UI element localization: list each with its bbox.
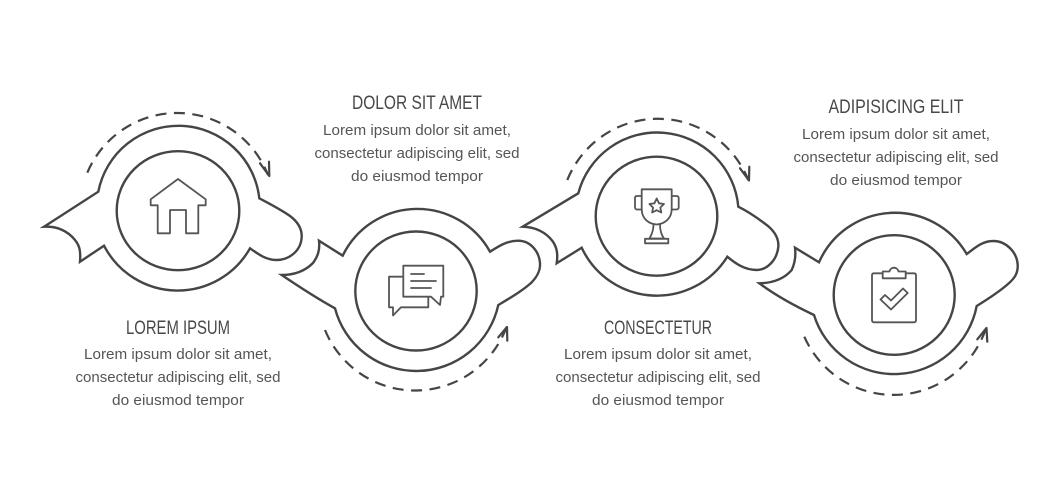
icon: house bbox=[151, 179, 206, 233]
outer bubble 1 bbox=[44, 126, 302, 291]
panel: step 2 bbox=[282, 209, 540, 391]
text block: lorem ipsum bbox=[76, 318, 280, 409]
dashed arrow 4 bbox=[804, 328, 987, 395]
panel: step 4 bbox=[759, 213, 1018, 395]
outer bubble 3 bbox=[523, 132, 778, 296]
body: consectetur bbox=[556, 347, 760, 409]
icon: trophy bbox=[635, 189, 679, 243]
dashed arrow 1 bbox=[87, 113, 269, 176]
heading: adipisicing elit: ADIPISICING ELIT bbox=[828, 97, 964, 118]
body: adipisicing elit: do eiusmod tempor bbox=[830, 173, 962, 189]
inner circle 4 bbox=[834, 235, 955, 355]
body: dolor sit amet bbox=[314, 123, 520, 185]
body: dolor sit amet: consectetur adipiscing elit, sed bbox=[314, 146, 520, 162]
body: consectetur: do eiusmod tempor bbox=[592, 393, 724, 409]
inner circle 1 bbox=[117, 151, 239, 270]
body: consectetur: Lorem ipsum dolor sit amet, bbox=[564, 347, 752, 363]
body: lorem ipsum: consectetur adipiscing elit, sed bbox=[76, 370, 280, 386]
body: adipisicing elit: Lorem ipsum dolor sit amet, bbox=[802, 127, 990, 143]
dashed arrow 2 bbox=[325, 327, 507, 391]
heading: dolor sit amet: DOLOR SIT AMET bbox=[352, 93, 482, 114]
heading: consectetur: CONSECTETUR bbox=[604, 318, 712, 339]
heading: lorem ipsum: LOREM IPSUM bbox=[126, 318, 230, 339]
body: lorem ipsum: Lorem ipsum dolor sit amet, bbox=[84, 347, 272, 363]
body: dolor sit amet: Lorem ipsum dolor sit amet, bbox=[323, 123, 511, 139]
dashed arrow 3 bbox=[567, 119, 749, 180]
body: dolor sit amet: do eiusmod tempor bbox=[351, 169, 483, 185]
panel: step 1 bbox=[44, 113, 302, 291]
icon: clipboard with check bbox=[872, 268, 916, 322]
body: consectetur: consectetur adipiscing elit, sed bbox=[556, 370, 760, 386]
body: lorem ipsum bbox=[76, 347, 280, 409]
text block: consectetur bbox=[556, 318, 760, 409]
inner circle 3 bbox=[596, 157, 717, 276]
body: lorem ipsum: do eiusmod tempor bbox=[112, 393, 244, 409]
inner circle 2 bbox=[355, 232, 477, 350]
body: adipisicing elit: consectetur adipiscing elit, sed bbox=[794, 150, 998, 166]
panel: step 3 bbox=[523, 119, 778, 296]
outer bubble 2 bbox=[282, 209, 540, 371]
text block: dolor sit amet bbox=[314, 93, 520, 185]
text block: adipisicing elit bbox=[794, 97, 998, 189]
outer bubble 4 bbox=[759, 213, 1018, 374]
icon: chat bubbles bbox=[389, 266, 443, 316]
body: adipisicing elit bbox=[794, 127, 998, 189]
